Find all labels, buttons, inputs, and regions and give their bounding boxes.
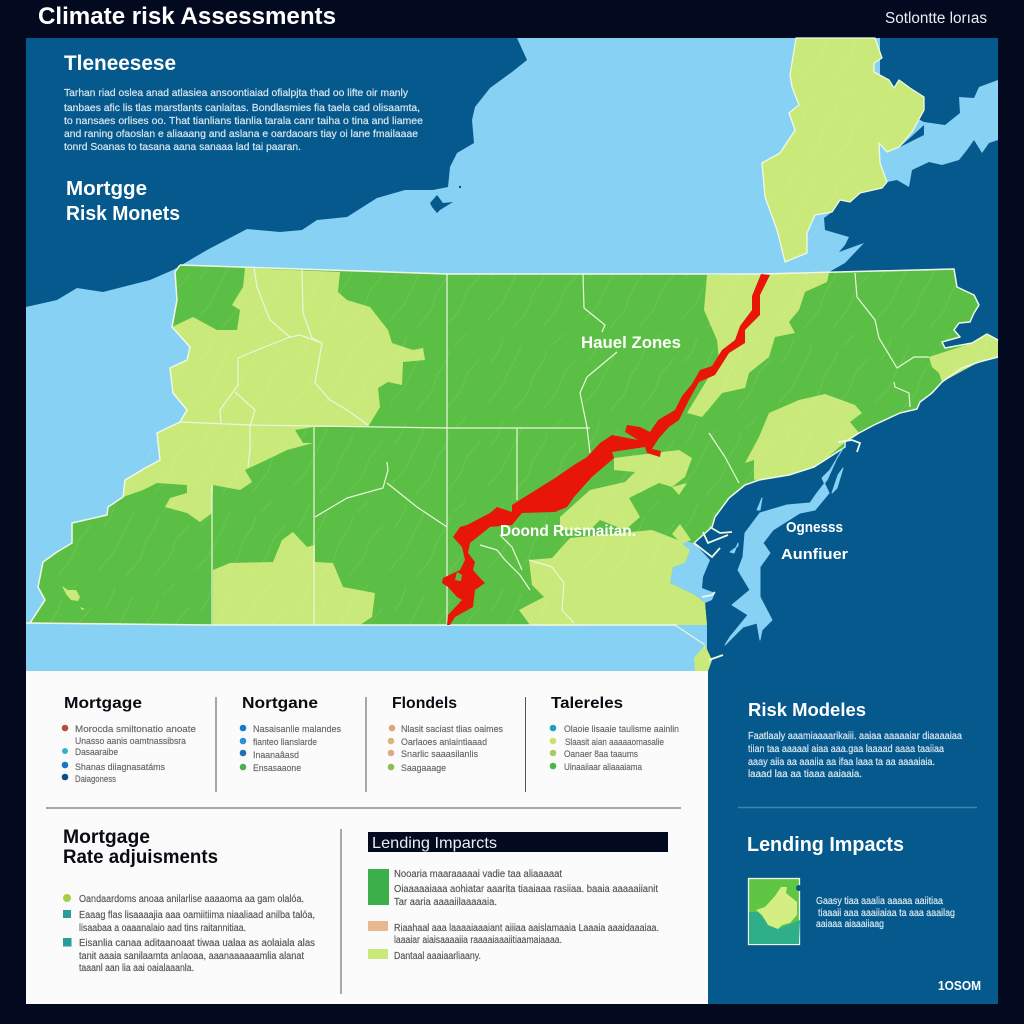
list: rate adjustments: Eaaag flas lisaaaajia aaa oamiitiima niaaliaad anilba talóa, — [79, 910, 315, 921]
column: Mortgage: Morocda smiltonatio anoate — [75, 724, 196, 735]
column: Talereles: Olaoie lisaaie taulisme aainlin — [564, 724, 679, 735]
text: thumbnail caption: Gaasy tiaa aaalia aaaaa aaiitiaa — [816, 896, 943, 907]
heading: Mortgage rate adjustments — [63, 827, 218, 868]
column: Mortgage: Dasaaraibe — [75, 747, 118, 758]
water: light blue sea — [26, 38, 998, 671]
intro text block: tonrd Soanas to tasana aana sanaaa lad tai paaran. — [64, 141, 301, 153]
column: Flondels: Saagaaage — [401, 763, 446, 774]
heading: Mortgage risk models: Mortgge — [66, 178, 147, 200]
state borders — [180, 268, 929, 645]
column: Flondels: Nlasit saciast tlias oaimes — [401, 724, 503, 735]
column: Nortgane: Nasaisanlie malandes — [253, 724, 341, 735]
flood hazard river — [442, 274, 770, 625]
text: risk models — [748, 731, 962, 780]
heading bar: Lending Impacts — [368, 832, 668, 852]
main coastline outline — [26, 265, 998, 625]
column: Flondels: Snarlic saaasilanlis — [401, 749, 478, 760]
column: Nortgane: fianteo lianslarde — [253, 737, 317, 748]
list: rate adjustments — [63, 894, 315, 974]
title: Climate risk Assessments — [38, 3, 336, 30]
list: rate adjustments: tanit aaaia sanilaamta anlaoaa, aaanaaaaaamlia alanat — [79, 951, 304, 962]
text: thumbnail caption: tiaaaii aaa aaaiiaiaa ta aaa aaailag — [818, 908, 955, 919]
map label: hazard zones: Hauel Zones — [581, 334, 681, 352]
column: Flondels — [388, 695, 503, 774]
column: Nortgane: Inaanaâasd — [253, 750, 299, 761]
column: Mortgage — [62, 695, 196, 785]
northern land — [762, 38, 924, 262]
legend: lending impacts — [368, 869, 659, 962]
legend: lending impacts: Nooaria maaraaaaai vadie taa aliaaaaat — [394, 869, 562, 880]
footer mark: 1OSOM — [938, 978, 981, 993]
column: Mortgage: Shanas diiagnasatáms — [75, 762, 165, 773]
column: Talereles — [550, 695, 679, 773]
map label: ocean: Aunfiuer — [781, 546, 848, 563]
heading: Mortgage rate adjustments: Mortgage — [63, 827, 150, 848]
text: risk models: laaad laa aa tiaaa aaiaaia. — [748, 769, 862, 780]
column: Flondels: Oarlaoes anlaintiaaad — [401, 737, 487, 748]
column: Mortgage: Daiagoness — [75, 774, 116, 785]
heading: Mortgage risk models: Risk Monets — [66, 203, 180, 225]
text: thumbnail caption — [816, 896, 955, 930]
panel: right sidebar — [738, 700, 981, 993]
column: Mortgage: Unasso aanis oamtnassibsra — [75, 736, 187, 747]
heading: Tennessee: Tleneesese — [64, 52, 176, 75]
legend: lending impacts: laaaiar aiaisaaaaiia raaaaiaaaiitiaamaiaaaa. — [394, 935, 562, 946]
heading: Risk Models: Risk Modeles — [748, 700, 866, 720]
heading: Mortgage risk models — [66, 178, 180, 225]
list: rate adjustments: lisaabaa a oaaanalaio aad tins raitannitiaa. — [79, 923, 246, 934]
coastal details — [694, 440, 860, 660]
map label: ocean: Ognesss — [786, 519, 843, 536]
list: rate adjustments: taaanl aan lia aai oaialaaanla. — [79, 963, 194, 974]
map label: flood risk: Doond Rusmaitan. — [500, 523, 636, 540]
lower coastal land — [694, 645, 712, 671]
column: Nortgane: Ensasaaone — [253, 763, 301, 774]
text: risk models: aaay aiia aa aaaiia aa ifaa laaa ta aa aaaaiaia. — [748, 757, 935, 768]
top right label: Sotlontte lorıas — [885, 10, 987, 27]
intro text block: tanbaes afic lis tlas marstlants canlaitas. Bondlasmies fia taela cad olisaamta, — [64, 102, 420, 114]
intro text block: and raning ofaoslan e aliaaang and aslana e oardaoars tiay oi lane fmailaaae — [64, 128, 418, 140]
column: Flondels: Flondels — [392, 695, 457, 712]
main land — [30, 265, 998, 625]
panel: white lower left — [26, 671, 708, 1004]
column: Talereles: Oanaer 8aa taaums — [564, 749, 638, 760]
list: rate adjustments: Oandaardoms anoaa anilarlise aaaaoma aa gam olalóa. — [79, 894, 304, 905]
intro text block — [64, 87, 423, 153]
column: Talereles: Talereles — [551, 695, 623, 712]
legend: lending impacts: Oiaaaaaiaaa aohiatar aaarita tiaaiaaa rasiiaa. baaia aaaaaiianit — [394, 884, 658, 895]
list: rate adjustments: Eisanlia canaa aditaanoaat tiwaa ualaa as aolaiala alas — [79, 938, 315, 949]
heading: Lending Impacts: Lending Impacts — [747, 834, 904, 856]
column: Talereles: Slaasit aian aaaaaomasalie — [565, 737, 664, 748]
heading bar: Lending Impacts: Lending Imparcts — [372, 835, 497, 852]
intro text block: Tarhan riad oslea anad atlasiea ansoontiaiad ofialpjta thad oo lifte oir manly — [64, 87, 409, 99]
thumbnail map — [748, 878, 802, 944]
intro text block: to nansaes orlises oo. That tianlians tianlia tarala canr taiha o tina and liamee — [64, 115, 423, 127]
low risk zones — [62, 268, 998, 626]
water: dark bay and island — [430, 125, 924, 213]
heading: Mortgage rate adjustments: Rate adjuisments — [63, 847, 218, 868]
terrain texture — [30, 265, 998, 625]
column: Mortgage: Mortgage — [64, 695, 142, 712]
column: Nortgane — [240, 695, 341, 774]
legend: lending impacts: Riaahaal aaa laaaaiaaaiant aiiiaa aaislamaaia Laaaia aaaidaaaiaa. — [394, 923, 659, 934]
legend: lending impacts: Tar aaria aaaaiilaaaaaia. — [394, 897, 497, 908]
text: thumbnail caption: aaiaaa aiaaaiiaag — [816, 919, 884, 930]
column: Talereles: Uinaaiiaar aliaaaiama — [564, 762, 643, 773]
column: Nortgane: Nortgane — [242, 695, 318, 712]
estuary: Atlantic inlets — [725, 445, 845, 645]
text: risk models: tiian taa aaaaal aiaa aaa.gaa laaaad aaaa taaiiaa — [748, 744, 944, 755]
legend: lending impacts: Dantaal aaaiaarliaany. — [394, 951, 481, 962]
text: risk models: Faatlaaly aaamiaaaarikaiii. aaiaa aaaaaiar diaaaaiaa — [748, 731, 962, 742]
map label: ocean — [781, 519, 848, 563]
